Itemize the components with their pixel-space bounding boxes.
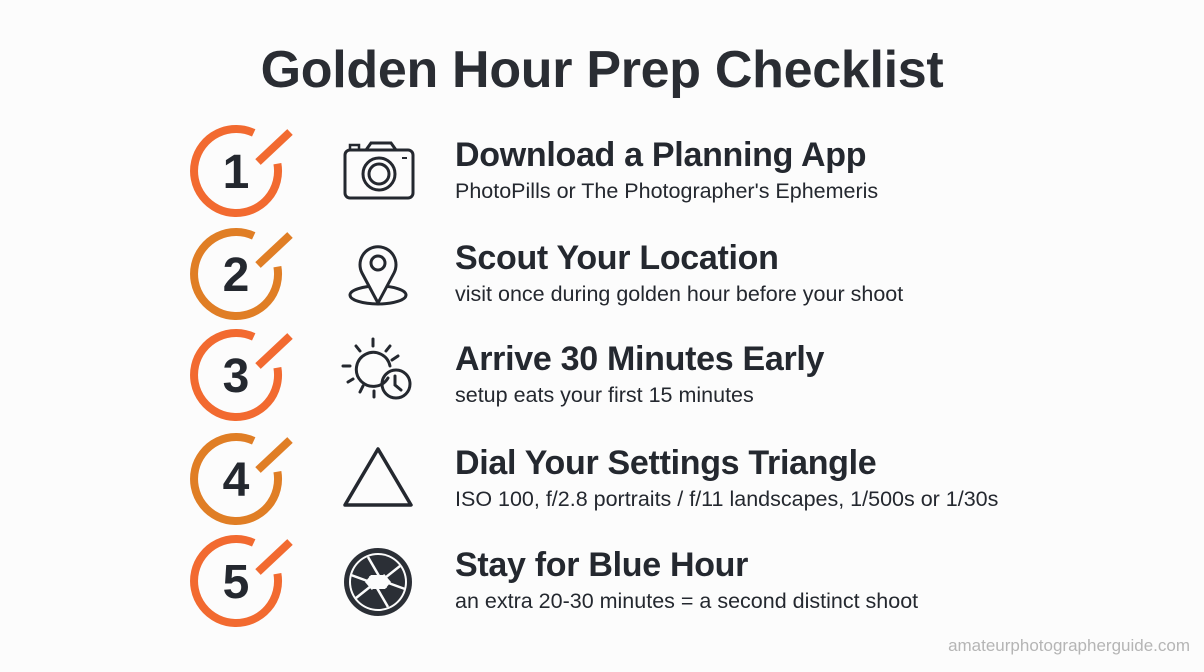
heading 4: Dial Your Settings Triangle [455,444,876,482]
item 2 [190,228,904,320]
subtext 1: PhotoPills or The Photographer's Ephemeris [455,179,878,203]
heading 1: Download a Planning App [455,136,866,174]
subtext 5: an extra 20-30 minutes = a second distinct shoot [455,589,918,613]
watermark: amateurphotographerguide.com [948,636,1190,655]
item 5 [190,535,918,627]
number badge 1 [190,125,293,217]
icon: camera [344,142,414,200]
number badge 2 [190,228,293,320]
item 4 [190,433,998,525]
subtext 3: setup eats your first 15 minutes [455,383,754,407]
item 1 [190,125,878,217]
icon: location pin [348,245,408,306]
heading 3: Arrive 30 Minutes Early [455,340,824,378]
number badge 3 [190,329,293,421]
icon: aperture [344,548,412,616]
subtext 4: ISO 100, f/2.8 portraits / f/11 landscapes, 1/500s or 1/30s [455,487,998,511]
heading 2: Scout Your Location [455,239,779,277]
number badge 5: 5 [223,556,249,609]
number badge 1: 1 [223,146,249,199]
number badge 4: 4 [223,454,250,507]
number badge 5 [190,535,293,627]
icon: triangle [343,447,413,507]
number badge 4 [190,433,293,525]
number badge 2: 2 [223,249,249,302]
item 3 [190,329,824,421]
title: Golden Hour Prep Checklist [261,41,943,99]
heading 5: Stay for Blue Hour [455,546,748,584]
number badge 3: 3 [223,350,249,403]
icon: sun with clock [342,338,412,400]
subtext 2: visit once during golden hour before your shoot [455,282,903,306]
